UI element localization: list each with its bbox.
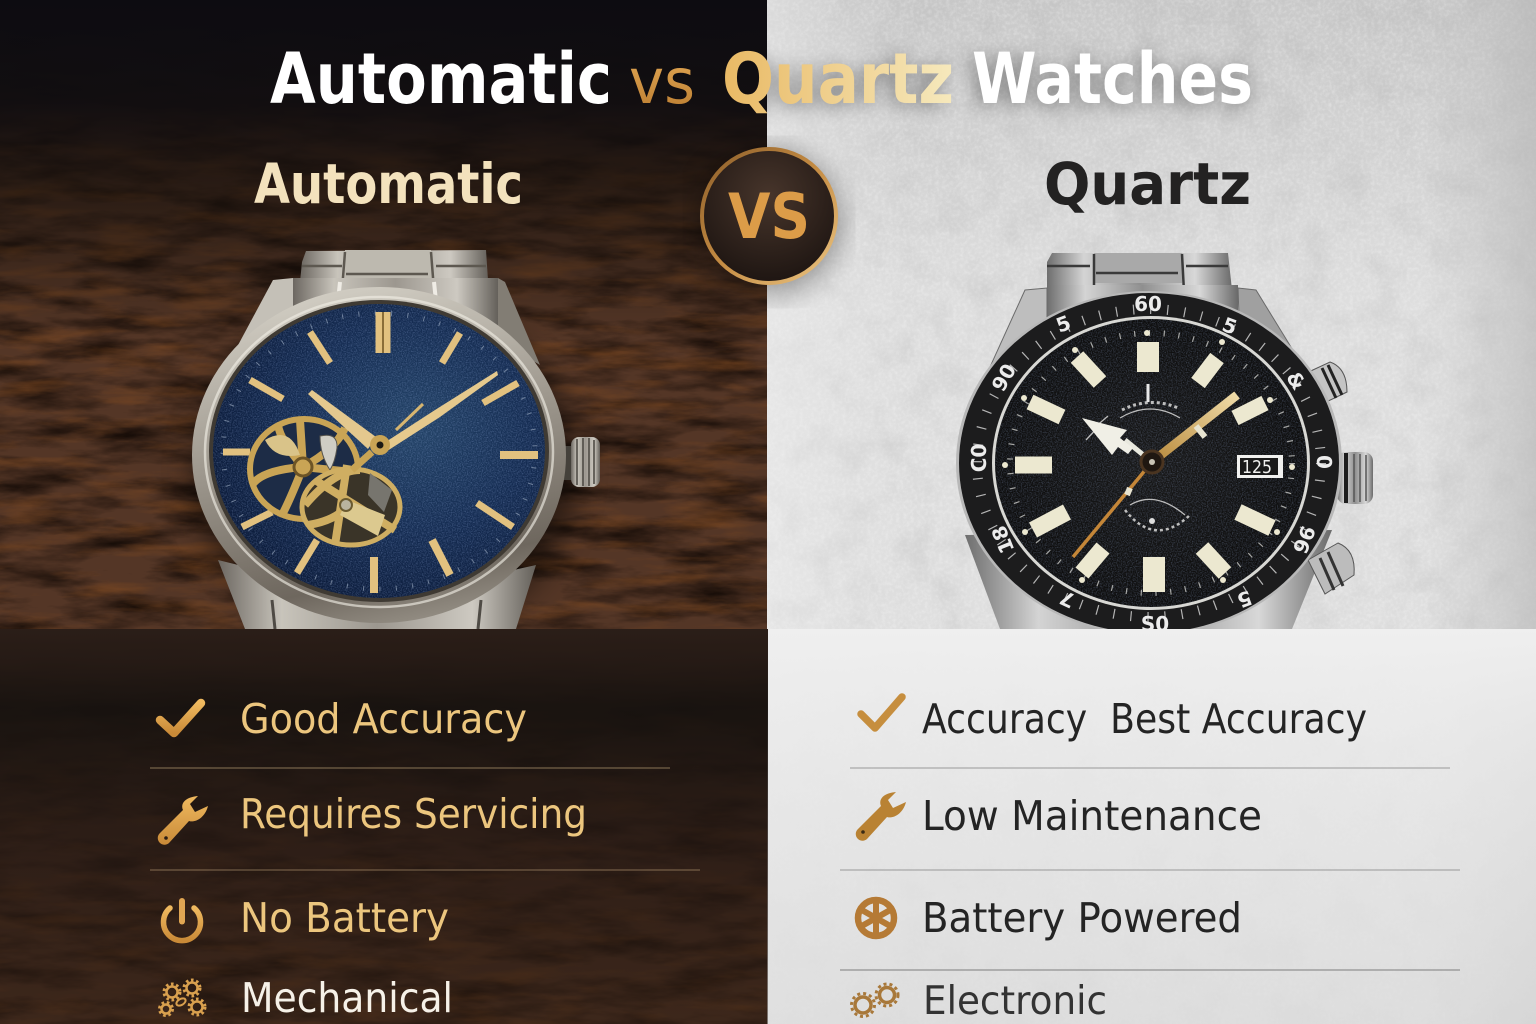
upper bracelet <box>293 250 498 330</box>
icon: gears <box>160 980 205 1016</box>
bezel numbers: 7 <box>1056 585 1079 613</box>
upper lugs <box>238 278 540 365</box>
gear wheel <box>302 465 400 545</box>
date window: 125 <box>1242 457 1272 478</box>
icon: gears <box>852 984 898 1016</box>
automatic feature: requires servicing <box>158 790 587 845</box>
quartz feature: electronic <box>852 979 1107 1024</box>
bezel numbers: 5 <box>1234 585 1255 613</box>
heading: automatic: Automatic <box>254 152 523 216</box>
icon: check mark <box>861 697 902 728</box>
quartz feature: electronic: Electronic <box>923 979 1107 1024</box>
vs badge <box>697 149 841 294</box>
icon: wheel <box>858 900 894 936</box>
automatic feature: mechanical: Mechanical <box>241 974 453 1022</box>
hairspring <box>320 435 337 470</box>
title shadow: Quartz Watches <box>722 41 1253 123</box>
automatic watch <box>190 250 600 645</box>
automatic feature: requires servicing: Requires Servicing <box>240 790 587 838</box>
quartz feature: battery powered: Battery Powered <box>922 894 1242 942</box>
bezel numbers: & <box>1281 367 1311 395</box>
heading: quartz: Quartz <box>1044 150 1251 218</box>
crown <box>562 437 600 487</box>
title: Automatic <box>270 38 612 120</box>
vs badge: VS <box>728 180 810 253</box>
title: Watches <box>972 38 1253 120</box>
skeleton movement <box>250 419 400 545</box>
bezel numbers <box>967 292 1336 636</box>
lower lugs and bracelet <box>218 560 536 629</box>
title <box>270 38 1253 120</box>
date window <box>1237 455 1283 478</box>
pushers and crown <box>1302 362 1373 594</box>
automatic feature: good accuracy: Good Accuracy <box>240 695 527 743</box>
divider lines <box>150 768 1460 970</box>
subdials <box>1086 384 1190 530</box>
black bezel <box>956 291 1342 635</box>
gold hour markers <box>223 312 538 593</box>
panel: quartz features backdrop <box>768 629 1536 1024</box>
automatic feature: mechanical <box>160 974 453 1022</box>
watch shadow <box>179 338 587 608</box>
blue dial <box>213 304 545 598</box>
quartz feature: low maintenance: Low Maintenance <box>922 792 1262 840</box>
icon: wrench <box>856 792 906 841</box>
quartz hands <box>1073 395 1237 557</box>
bezel numbers: 0 <box>1312 455 1336 469</box>
title: vs <box>629 45 695 118</box>
watch hands <box>308 371 498 470</box>
icon: wrench <box>158 796 208 845</box>
bezel numbers: 5 <box>1053 310 1074 338</box>
title: Quartz <box>722 38 954 120</box>
panel: quartz background <box>767 0 1536 1024</box>
black dial <box>992 316 1310 610</box>
bezel numbers: 60 <box>1134 292 1162 316</box>
quartz watch <box>956 253 1373 636</box>
icon: power symbol <box>163 901 200 941</box>
bezel numbers: 5 <box>1219 312 1240 340</box>
quartz feature: accuracy: Accuracy Best Accuracy <box>922 695 1367 743</box>
bezel numbers: 18 <box>987 522 1019 557</box>
balance wheel <box>250 419 358 519</box>
panel: automatic background <box>0 0 767 1024</box>
upper bracelet <box>1047 253 1238 317</box>
bezel numbers: C0 <box>967 444 991 472</box>
bezel numbers: S0 <box>1141 612 1169 636</box>
panel: automatic features backdrop <box>0 629 768 1024</box>
bezel numbers: 90 <box>987 359 1021 396</box>
lume dots <box>1002 330 1295 583</box>
luminous hour markers <box>1015 342 1272 592</box>
icon: check mark <box>160 703 201 733</box>
lugs and lower bracelet <box>965 288 1332 629</box>
watch case <box>192 287 566 623</box>
automatic feature: no battery: No Battery <box>240 894 449 942</box>
bezel numbers: 96 <box>1288 522 1320 557</box>
